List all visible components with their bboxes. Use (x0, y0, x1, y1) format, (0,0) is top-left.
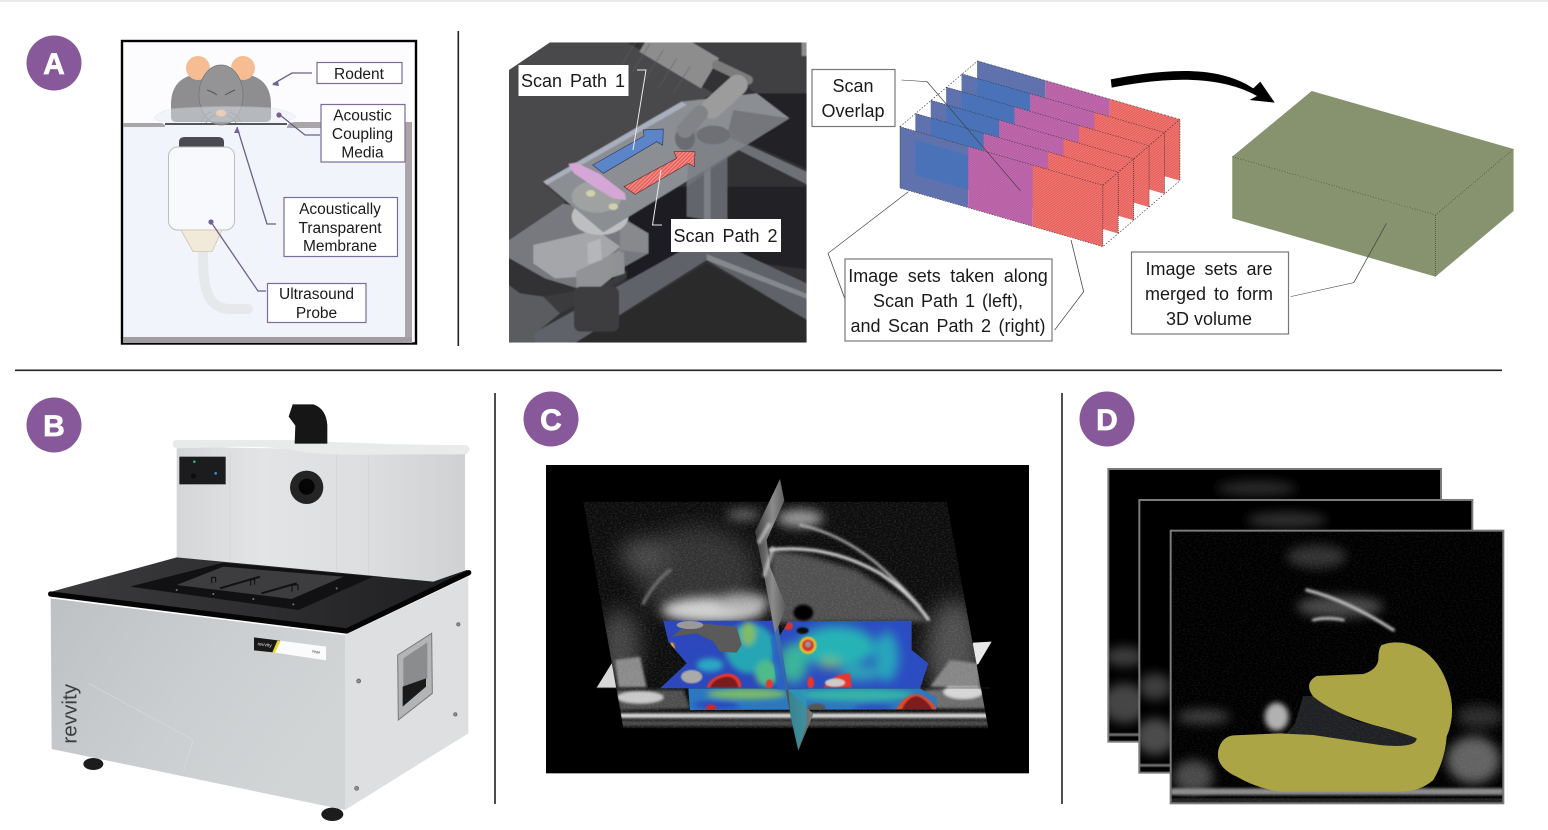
product label: Vega (312, 649, 321, 654)
middle frame (1135, 500, 1472, 773)
panel A: overlapping image sets diagram (812, 61, 1514, 341)
leader lines (211, 73, 320, 291)
label: Scan Overlap: Overlap (821, 101, 885, 121)
badge D: D (1096, 404, 1118, 437)
label: Acoustic Coupling Media: Media (341, 144, 384, 162)
panel C: 3D ultrasound with colour map (546, 465, 1029, 773)
orthogonal slice (755, 479, 813, 751)
badge A: A (43, 48, 65, 81)
label: Image sets taken along: Image sets taken along (848, 266, 1048, 286)
label: Scan Path 2 (671, 219, 781, 252)
label: Image sets taken along (845, 259, 1052, 341)
3D volume (1232, 91, 1514, 277)
label: Acoustic Coupling Media: Coupling (332, 126, 393, 143)
label: Scan Path 1: Scan Path 1 (521, 71, 625, 91)
badge D (1080, 392, 1134, 446)
camera (289, 404, 327, 444)
logo: revvity (59, 683, 82, 744)
label: Image sets taken along: Scan Path 1 (left), (873, 291, 1023, 311)
arrow: scan path 1 (593, 129, 663, 173)
ultrasound slice (583, 502, 990, 728)
icon: ultrasound probe (168, 137, 248, 309)
label: Scan Overlap: Scan (832, 76, 874, 96)
badge B (26, 398, 82, 452)
label: Acoustically Transparent Membrane (284, 198, 398, 256)
label: Image sets merged (1132, 252, 1288, 334)
tray (130, 563, 373, 610)
port (290, 471, 323, 504)
label: Scan Overlap (812, 70, 895, 126)
label: Image sets merged: merged to form (1145, 284, 1273, 304)
frames back to front (977, 61, 1180, 181)
arrow: scan path 2 (624, 152, 695, 194)
lower body (51, 577, 468, 810)
label: Acoustic Coupling Media (321, 104, 405, 162)
badge C (524, 392, 578, 446)
front frame (1171, 531, 1503, 803)
label: Acoustically Transparent Membrane: Acoustically (299, 201, 381, 218)
back frame (1102, 469, 1441, 742)
colour map overlay (657, 620, 940, 713)
label: Scan Path 2: Scan Path 2 (673, 226, 778, 246)
icon: rodent (154, 56, 296, 125)
label: Acoustically Transparent Membrane: Membrane (303, 238, 377, 255)
label: Acoustic Coupling Media: Acoustic (333, 108, 392, 124)
yellow segmentation mask (1218, 642, 1452, 792)
control panel (179, 457, 226, 484)
side handle (398, 633, 432, 720)
panel A: scan path render (507, 37, 810, 345)
label: Rodent: Rodent (334, 66, 385, 83)
label: Ultrasound Probe (268, 284, 366, 322)
label: Scan Path 1 (518, 65, 628, 96)
leader lines (828, 80, 1386, 330)
arrow: merge (1111, 71, 1275, 103)
panel D: segmented image stack (1102, 469, 1503, 803)
tabletop (50, 557, 471, 631)
upper housing (173, 440, 469, 582)
panel B: instrument photo (50, 404, 471, 821)
label: Image sets taken along: and Scan Path 2 (right) (850, 316, 1046, 336)
label: Acoustically Transparent Membrane: Transparent (298, 220, 382, 237)
label: Ultrasound Probe: Ultrasound (279, 286, 354, 303)
badge C: C (540, 404, 562, 437)
label: Ultrasound Probe: Probe (296, 305, 337, 322)
label: Image sets merged: 3D volume (1166, 309, 1252, 329)
feet (83, 736, 442, 821)
product label: revvity (257, 641, 273, 649)
label: Rodent (317, 62, 402, 84)
label: Image sets merged: Image sets are (1145, 259, 1273, 279)
badge A (26, 36, 82, 90)
badge B: B (43, 410, 65, 443)
horizontal plane wedges (597, 660, 640, 688)
screws (355, 623, 460, 790)
leader lines (633, 70, 662, 225)
product label (254, 637, 326, 660)
panel A: rodent setup schematic (122, 41, 416, 344)
